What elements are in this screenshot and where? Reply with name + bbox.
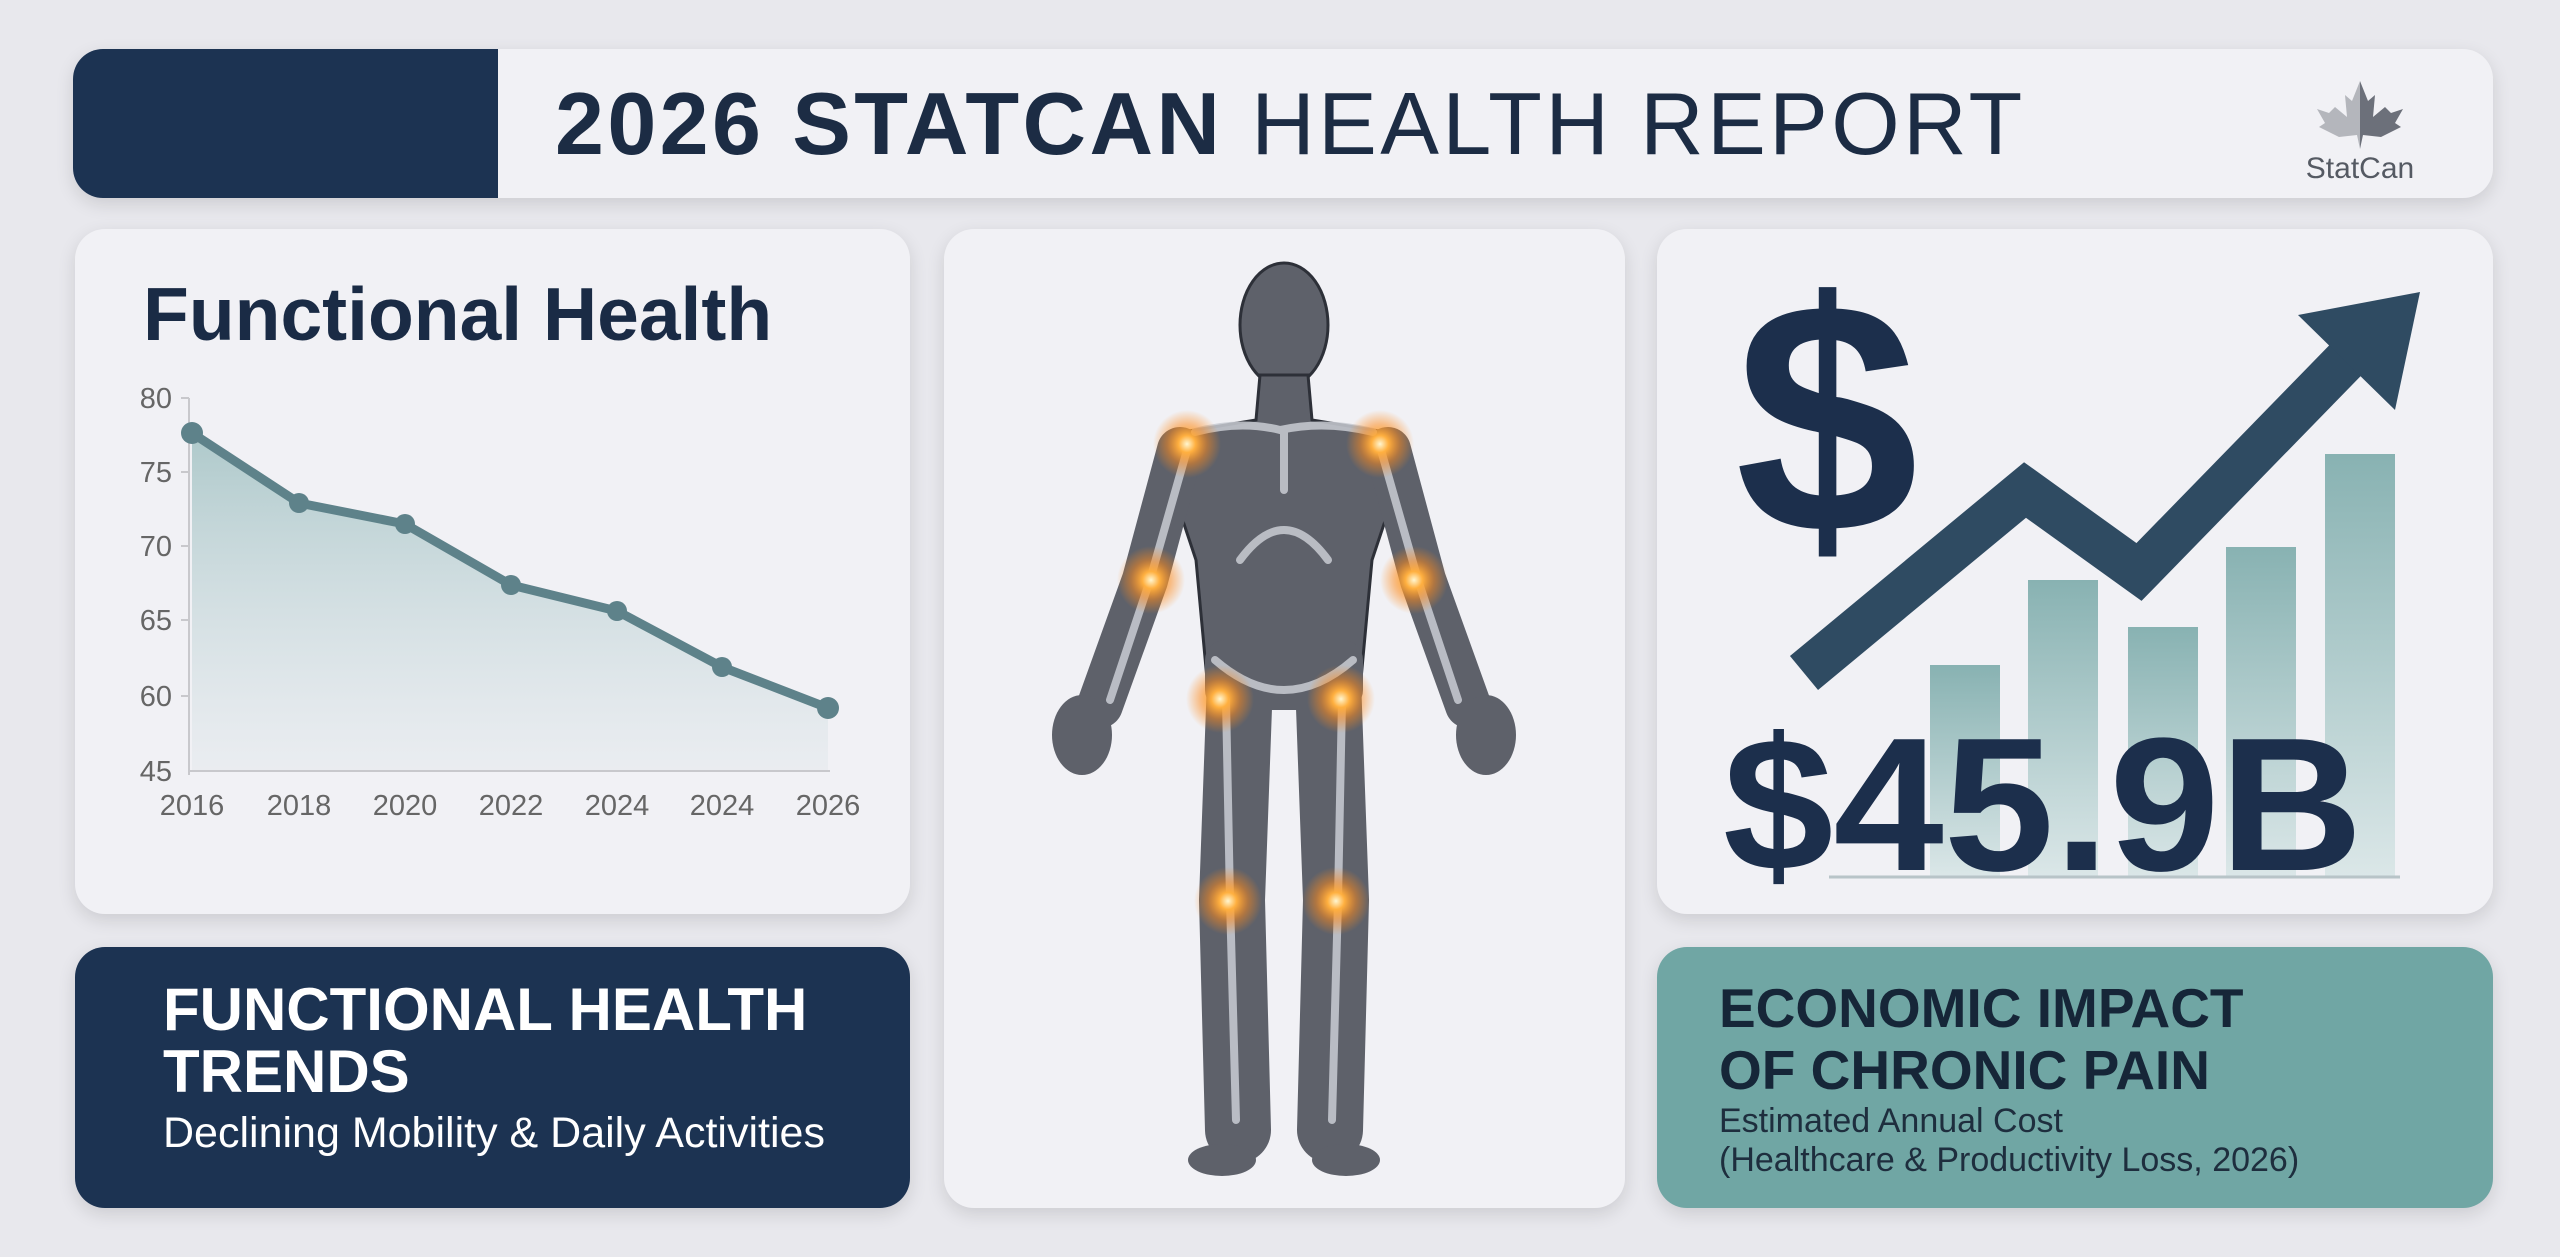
caption heading: [1719, 977, 2244, 1101]
header bar: [73, 49, 2493, 198]
line chart: [140, 383, 860, 822]
line chart: 65: [140, 605, 172, 637]
line chart: 75: [140, 457, 172, 489]
line chart: 2020: [373, 790, 437, 822]
caption subtitle: [1719, 1102, 2299, 1179]
line chart: 2024: [690, 790, 754, 822]
bar chart: [1930, 454, 2395, 877]
title: 2026 STATCAN HEALTH REPORT: [555, 74, 2026, 173]
logo: StatCan maple leaf: StatCan: [2306, 152, 2414, 185]
line chart: 80: [140, 383, 172, 415]
heading: Functional Health: Functional Health: [143, 272, 772, 356]
icon: human body with glowing joints: [1052, 262, 1516, 1176]
line chart: 2022: [479, 790, 543, 822]
panel: functional health chart: [75, 229, 910, 914]
caption subtitle: Estimated Annual Cost: [1719, 1102, 2063, 1140]
line chart: 2024: [585, 790, 649, 822]
caption subtitle: (Healthcare & Productivity Loss, 2026): [1719, 1141, 2299, 1179]
panel: economic cost graphic: [1657, 229, 2493, 914]
line chart: 2026: [796, 790, 860, 822]
panel: economic impact caption: [1657, 947, 2493, 1208]
big dollar sign: $: [1735, 233, 1919, 602]
caption heading: OF CHRONIC PAIN: [1719, 1039, 2210, 1101]
line chart: 70: [140, 531, 172, 563]
arrow: [1804, 335, 2370, 673]
header dark block: [73, 49, 498, 198]
caption subtitle: Declining Mobility & Daily Activities: [163, 1109, 825, 1157]
caption heading: TRENDS: [163, 1038, 410, 1105]
caption heading: FUNCTIONAL HEALTH: [163, 976, 807, 1043]
value: $45.9B: $45.9B: [1723, 699, 2363, 911]
line chart: 2018: [267, 790, 331, 822]
panel: body figure: [944, 229, 1625, 1208]
line chart: 60: [140, 681, 172, 713]
line chart: 2016: [160, 790, 224, 822]
caption heading: [163, 976, 807, 1105]
panel: functional health trends caption: [75, 947, 910, 1208]
logo: StatCan maple leaf: [2306, 81, 2414, 185]
line chart: 45: [140, 756, 172, 788]
caption heading: ECONOMIC IMPACT: [1719, 977, 2244, 1039]
